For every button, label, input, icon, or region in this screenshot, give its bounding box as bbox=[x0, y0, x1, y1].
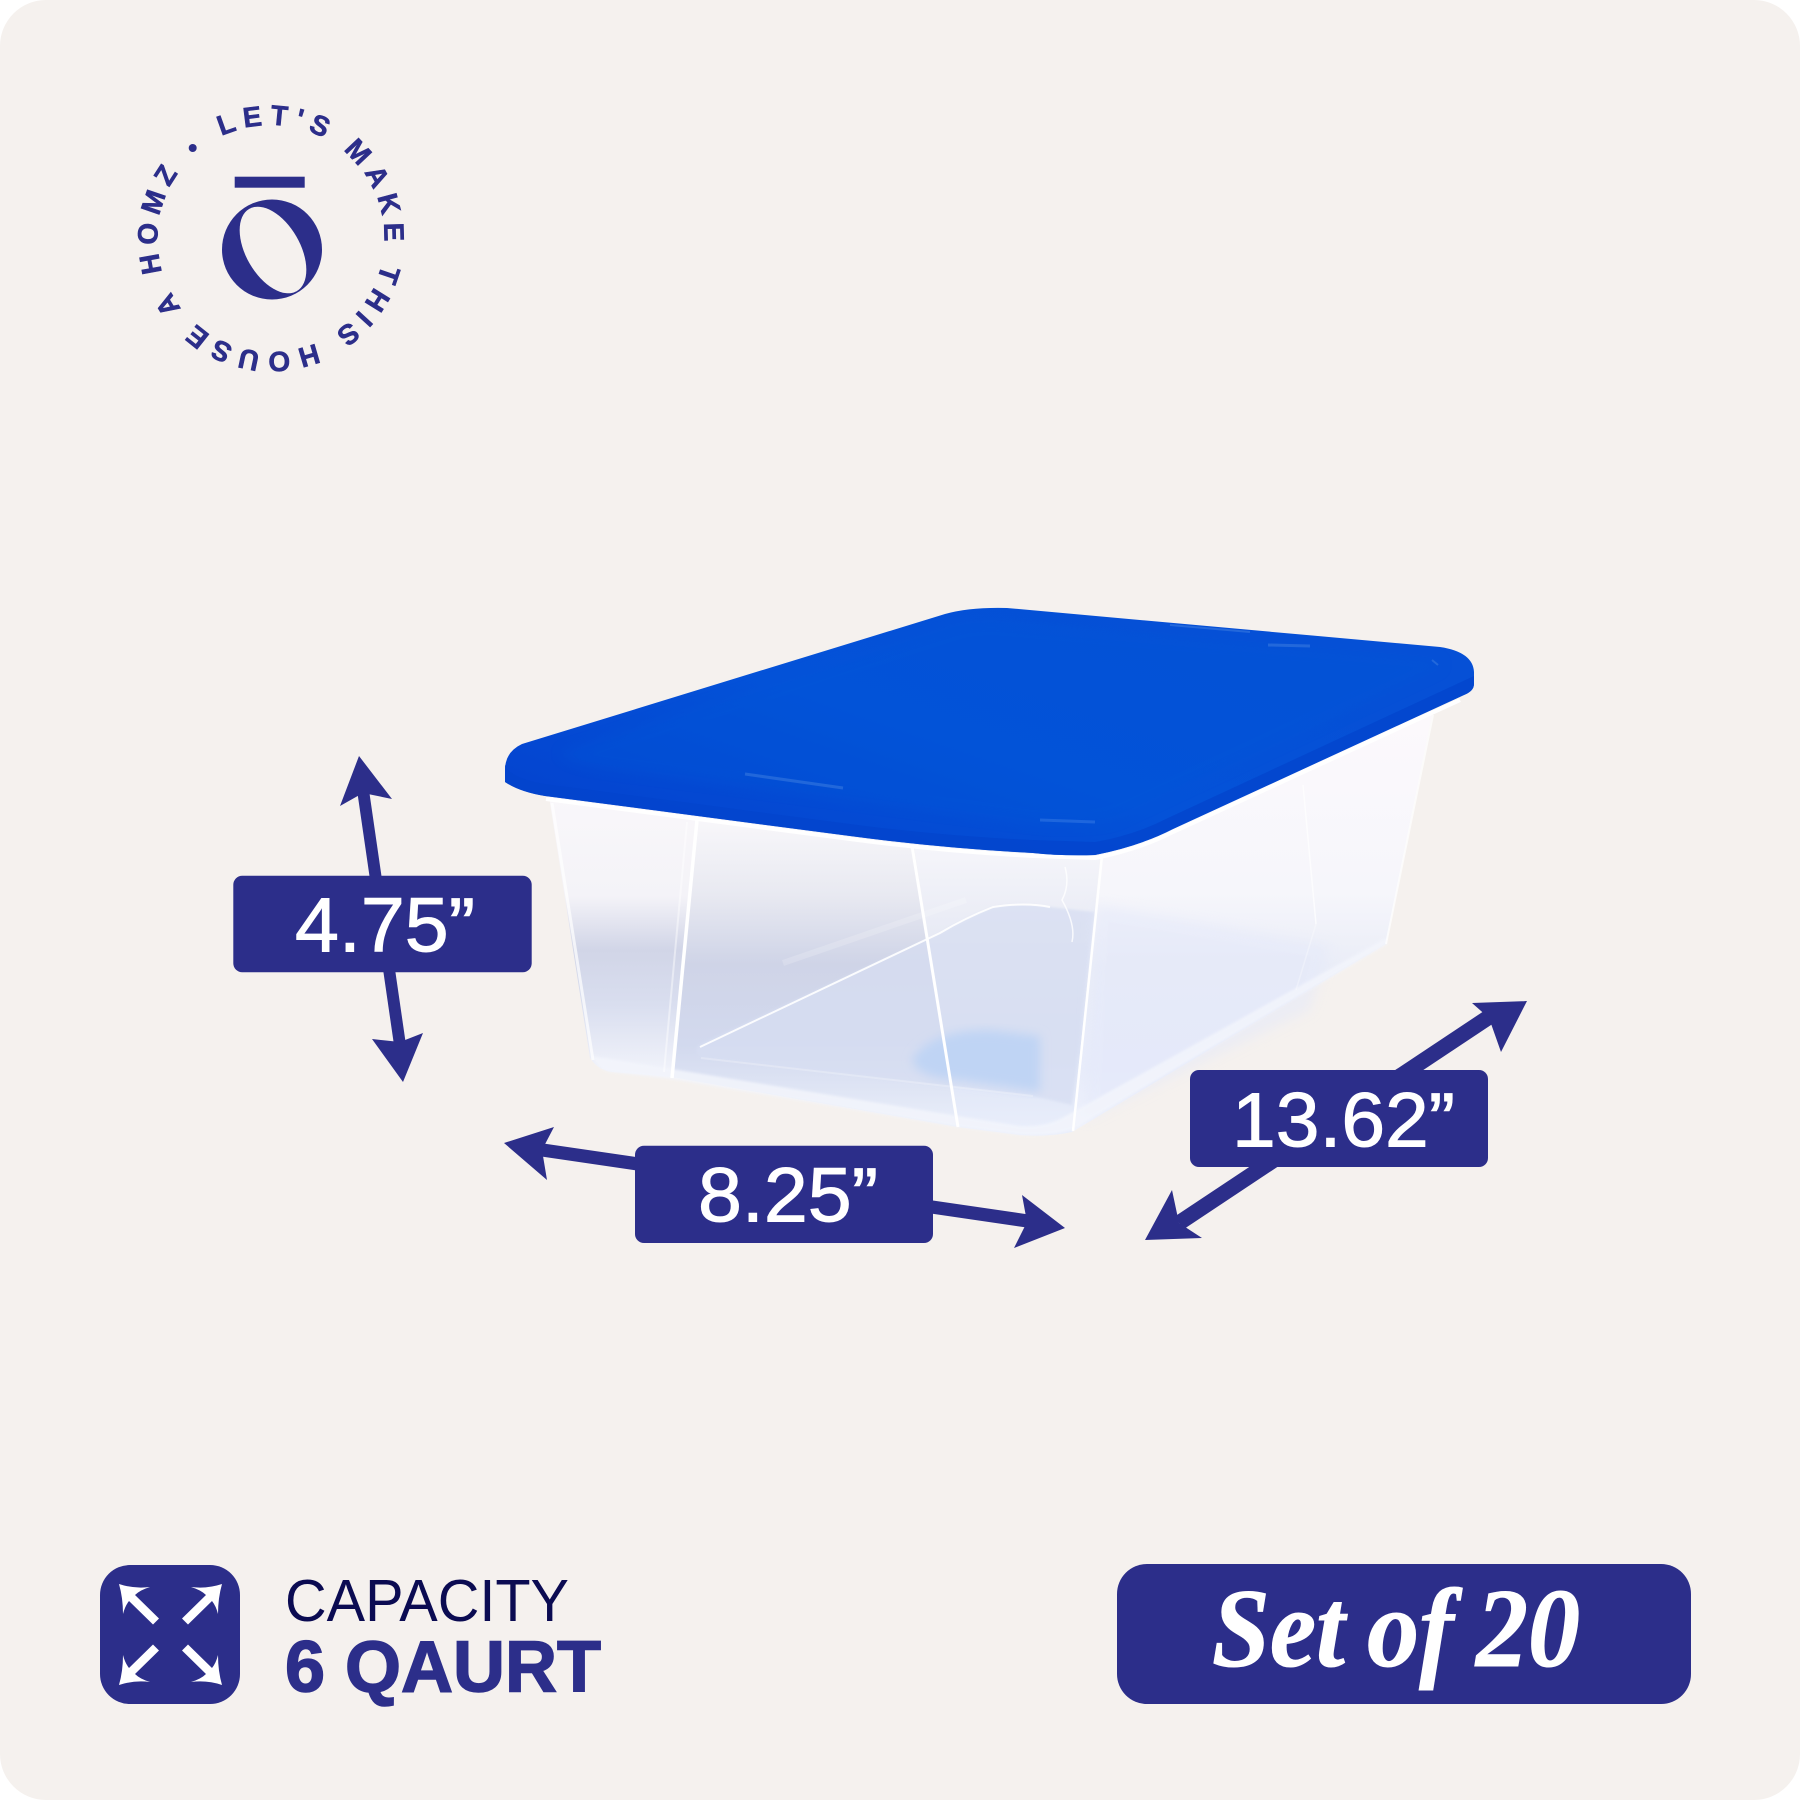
box: base rim bbox=[592, 938, 1387, 1135]
box: front panel bbox=[672, 810, 958, 1127]
capacity value: 6 QAURT bbox=[285, 1628, 601, 1708]
arrow shaft: height bbox=[357, 790, 406, 1045]
icon arrow: top right bbox=[182, 1584, 222, 1624]
set-of badge: Set of 20 bbox=[1212, 1567, 1580, 1691]
label: height 4.75: 4.75” bbox=[295, 882, 475, 968]
box: blue lid bbox=[505, 608, 1474, 855]
arrow head: width left bbox=[504, 1127, 554, 1180]
label: depth 13.62 bbox=[1190, 1070, 1488, 1167]
label: depth 13.62: 13.62” bbox=[1232, 1078, 1455, 1164]
box: lid inner recess bbox=[560, 621, 1441, 824]
arrow: height bbox=[340, 756, 423, 1082]
arrow: width bbox=[504, 1127, 1065, 1248]
box: floor right bbox=[1085, 905, 1330, 1120]
capacity text bbox=[285, 1568, 601, 1708]
logo: macron bar bbox=[235, 177, 305, 188]
logo: letter o bbox=[222, 195, 322, 305]
arrow head: depth bottom bbox=[1145, 1190, 1202, 1240]
logo: dot bbox=[189, 144, 197, 152]
box: right panel bbox=[1072, 710, 1433, 1132]
arrow head: height top bbox=[340, 756, 392, 806]
logo badge bbox=[138, 104, 404, 372]
icon arrow: bottom right bbox=[182, 1644, 222, 1685]
capacity label: CAPACITY bbox=[285, 1568, 569, 1634]
box: moulded lines bbox=[552, 715, 1433, 1131]
icon: expand arrows bbox=[100, 1565, 240, 1704]
arrow: depth bbox=[1145, 1001, 1527, 1240]
arrow head: height bottom bbox=[372, 1033, 423, 1082]
logo: circular slogan: LET'S MAKE THIS HOUSE A HOMZ bbox=[138, 104, 404, 372]
arrow head: depth top bbox=[1472, 1001, 1527, 1052]
label: height 4.75 bbox=[233, 876, 532, 972]
box: blue reflection bbox=[912, 1030, 1040, 1092]
storage box bbox=[505, 608, 1474, 1136]
box: lid embossed details bbox=[745, 625, 1438, 822]
icon arrow: top left bbox=[119, 1584, 159, 1624]
arrow head: width right bbox=[1014, 1195, 1065, 1248]
set-of badge bbox=[1117, 1564, 1691, 1704]
arrow shaft: width bbox=[538, 1143, 1032, 1228]
arrow shaft: depth bbox=[1174, 1011, 1494, 1229]
label: width 8.25: 8.25” bbox=[698, 1153, 878, 1239]
box: white seal under lid bbox=[546, 700, 1460, 858]
box: floor bbox=[696, 904, 1095, 1105]
box: lid rim shading bbox=[505, 676, 1474, 855]
label: width 8.25 bbox=[635, 1146, 933, 1243]
box: centre corner panel bbox=[913, 840, 1101, 1136]
icon arrow: bottom left bbox=[119, 1644, 159, 1685]
box: left panel bbox=[548, 790, 697, 1077]
